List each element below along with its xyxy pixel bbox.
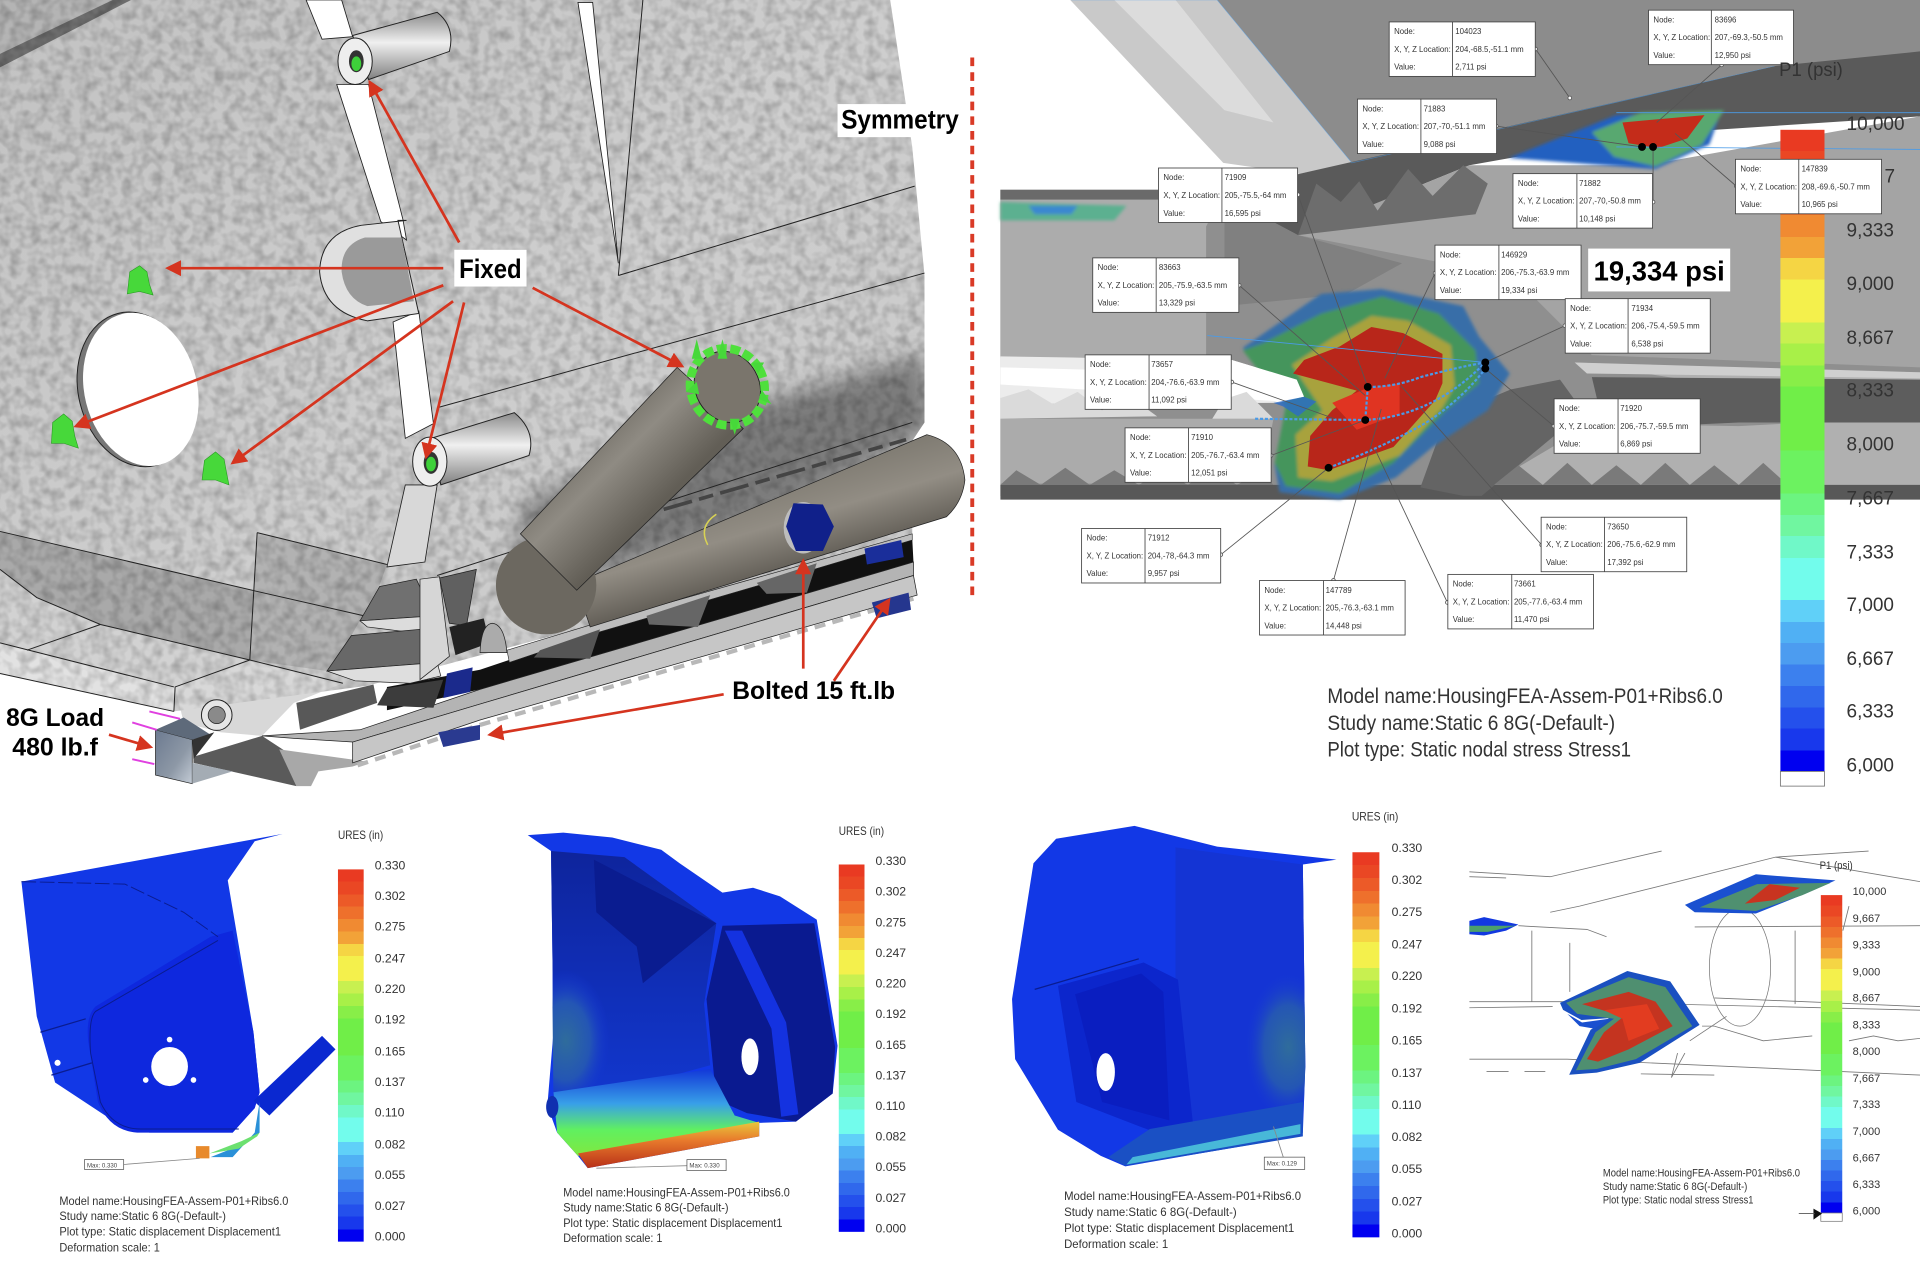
callout: node 71910: [1125, 428, 1271, 482]
callout: node 147839: [1735, 159, 1882, 214]
callout: node 71910: Value:: [1130, 469, 1152, 478]
callout: node 71920: Value:: [1559, 440, 1581, 449]
model info B: Model name:HousingFEA-Assem-P01+Ribs6.0: [563, 1185, 790, 1199]
model info A: Model name:HousingFEA-Assem-P01+Ribs6.0: [59, 1194, 289, 1208]
legend labels B: [839, 824, 906, 1235]
callout: node 73650: Value:: [1546, 558, 1568, 567]
callout: node 147789: Value:: [1264, 621, 1286, 630]
callout: node 146929: Node:: [1440, 250, 1461, 259]
peak stress label: 19,334 psi: [1594, 255, 1725, 286]
mesh zigzag facets: [1000, 165, 1788, 485]
callout: node 71883: Node:: [1362, 104, 1383, 113]
legend labels B: 0.247: [876, 946, 906, 960]
fixed ring on tube end: [676, 335, 779, 439]
heat map: left strip: [1000, 202, 1127, 220]
legend labels A: 0.000: [375, 1229, 406, 1243]
callout: node 73661: [1448, 574, 1593, 629]
callout: node 71909: 16,595 psi: [1225, 209, 1261, 218]
callout: node 71909: Value:: [1163, 209, 1185, 218]
legend labels B: 0.275: [876, 915, 906, 929]
callout: node 147839: Value:: [1740, 200, 1762, 209]
callout: node 147839: Node:: [1740, 165, 1761, 174]
legend labels B: 0.220: [876, 977, 906, 991]
callout: node 71912: 9,957 psi: [1148, 569, 1180, 578]
callout: node 71883: 9,088 psi: [1424, 140, 1456, 149]
legend labels B: 0.137: [876, 1068, 906, 1082]
model info: Plot type: Static nodal stress Stress1: [1327, 739, 1631, 762]
legend bar C: [1352, 852, 1379, 1237]
label: 8G Load: [6, 704, 104, 762]
callout: node 73661: Node:: [1453, 580, 1474, 589]
legend labels C: 0.137: [1392, 1066, 1422, 1080]
callout: node 71882: Value:: [1518, 214, 1540, 223]
load arrows: [132, 711, 180, 764]
callout: node 147789: [1260, 581, 1405, 635]
leader lines: [1219, 47, 1738, 604]
callout: node 71912: 204,-78,-64.3 mm: [1148, 551, 1210, 560]
legend labels C: 0.055: [1392, 1162, 1422, 1176]
max marker A: [84, 1158, 200, 1169]
model info A: [59, 1194, 289, 1254]
lower rail: [262, 534, 917, 765]
callout: node 146929: 19,334 psi: [1501, 286, 1537, 295]
callout: node 71883: 207,-70,-51.1 mm: [1424, 122, 1485, 131]
callout: node 104023: 104023: [1455, 27, 1482, 36]
stress legend labels: 6,333: [1847, 702, 1894, 723]
model info A: Plot type: Static displacement Displacement1: [59, 1225, 281, 1239]
callout: node 83696: [1649, 10, 1794, 65]
housing model C: [1012, 826, 1337, 1166]
legend labels B: 0.055: [876, 1160, 906, 1174]
callout: node 147839: 208,-69.6,-50.7 mm: [1802, 182, 1870, 191]
stress legend labels: 10,000: [1847, 114, 1905, 135]
callout: node 83696: 12,950 psi: [1715, 51, 1751, 60]
callout: node 83663: X, Y, Z Location:: [1098, 281, 1154, 290]
legend labels B: 0.000: [876, 1221, 906, 1235]
legend labels B: 0.330: [876, 854, 906, 868]
legend bar D: [1799, 895, 1842, 1221]
model info C: Study name:Static 6 8G(-Default-): [1064, 1205, 1237, 1219]
legend labels D: 9,000: [1853, 966, 1880, 978]
model info C: Model name:HousingFEA-Assem-P01+Ribs6.0: [1064, 1189, 1301, 1203]
legend labels B: URES (in): [839, 824, 884, 838]
callout: node 73650: 206,-75.6,-62.9 mm: [1607, 540, 1676, 549]
panel: displacement view C: [1012, 809, 1422, 1251]
heat map D: upper: [1685, 874, 1836, 913]
stress legend labels: 6,667: [1847, 649, 1894, 670]
arrows from Bolted: [490, 561, 889, 735]
model info C: Plot type: Static displacement Displacement1: [1064, 1221, 1294, 1235]
end boss: [201, 700, 232, 730]
legend labels A: 0.027: [375, 1199, 406, 1213]
callout: node 71920: 206,-75.7,-59.5 mm: [1620, 422, 1689, 431]
model info A: Study name:Static 6 8G(-Default-): [59, 1209, 226, 1223]
callout: node 147789: 205,-76.3,-63.1 mm: [1326, 604, 1394, 613]
legend labels C: 0.082: [1392, 1130, 1422, 1144]
callout: node 73657: 204,-76.6,-63.9 mm: [1151, 378, 1220, 387]
legend labels B: 0.082: [876, 1130, 906, 1144]
legend labels D: P1 (psi): [1820, 860, 1853, 872]
callout: node 71909: 205,-75.5,-64 mm: [1225, 191, 1286, 200]
callout: node 83696: 83696: [1715, 15, 1737, 24]
callout: node 147789: 147789: [1326, 586, 1352, 595]
callout: node 71934: Value:: [1570, 339, 1592, 348]
legend labels A: [338, 828, 406, 1243]
callout: node 71882: 71882: [1579, 179, 1601, 188]
callout: node 73661: X, Y, Z Location:: [1453, 597, 1509, 606]
legend labels C: 0.110: [1392, 1098, 1422, 1112]
stress legend labels: 7,667: [1847, 488, 1894, 509]
stress legend labels: [1779, 60, 1905, 776]
blue study outlines: [1071, 0, 1920, 468]
callout: node 71882: 207,-70,-50.8 mm: [1579, 197, 1641, 206]
legend labels A: 0.082: [375, 1138, 406, 1152]
callout: node 71934: 206,-75.4,-59.5 mm: [1631, 322, 1700, 331]
shading on housing: [0, 0, 931, 736]
callout: node 73650: Node:: [1546, 522, 1567, 531]
callout: node 147789: 14,448 psi: [1326, 621, 1362, 630]
label: Fixed: Fixed: [459, 254, 522, 284]
label: Symmetry: Symmetry: [841, 105, 959, 135]
bolts: [438, 502, 911, 747]
callout: node 71920: X, Y, Z Location:: [1559, 422, 1616, 431]
legend labels A: 0.302: [375, 889, 406, 903]
model info B: Plot type: Static displacement Displacement1: [563, 1216, 783, 1230]
stress legend labels: 7,333: [1847, 542, 1894, 563]
arrows from Fixed: [76, 82, 682, 463]
panel: displacement view B: [522, 824, 906, 1245]
stress legend labels: 8,000: [1847, 435, 1894, 456]
legend labels A: 0.137: [375, 1075, 406, 1089]
callout: node 71909: Node:: [1163, 173, 1184, 182]
callout: node 146929: 206,-75.3,-63.9 mm: [1501, 268, 1569, 277]
heat map D: left: [1469, 917, 1518, 936]
probe points: [1325, 143, 1657, 472]
legend bar A: [338, 869, 364, 1242]
model info: [1327, 685, 1723, 762]
panel: stress probe plot: [1000, 0, 1920, 786]
callout: node 71910: X, Y, Z Location:: [1130, 451, 1187, 460]
callout: node 104023: Value:: [1394, 63, 1416, 72]
model info C: Deformation scale: 1: [1064, 1237, 1168, 1251]
legend labels D: [1820, 860, 1886, 1218]
legend labels D: 6,333: [1853, 1179, 1880, 1191]
callout: node 104023: Node:: [1394, 27, 1415, 36]
peak stress label: [1588, 249, 1730, 291]
callout: node 83663: Node:: [1098, 263, 1119, 272]
model info D: Plot type: Static nodal stress Stress1: [1603, 1195, 1753, 1207]
callout: node 104023: 204,-68.5,-51.1 mm: [1455, 45, 1524, 54]
label: 8G Load: 480 lb.f: [12, 734, 99, 762]
legend bar B: [839, 864, 864, 1232]
model info D: Study name:Static 6 8G(-Default-): [1603, 1181, 1747, 1193]
legend labels A: 0.275: [375, 920, 406, 934]
max marker B: [596, 1160, 726, 1171]
callout: node 71910: 205,-76.7,-63.4 mm: [1191, 451, 1260, 460]
max marker C: Max: 0.129: [1267, 1161, 1298, 1168]
callout: node 71882: Node:: [1518, 179, 1539, 188]
panel: stress iso-plot view D: [1469, 851, 1920, 1221]
exhaust tube lower: [496, 435, 965, 634]
callout: node 71909: [1158, 168, 1298, 222]
label: 8G Load: 8G Load: [6, 704, 104, 732]
end rib and dark load arm: [193, 736, 367, 786]
legend labels A: URES (in): [338, 828, 383, 842]
callout: node 71910: 71910: [1191, 433, 1214, 442]
legend labels C: 0.027: [1392, 1195, 1422, 1209]
callout: node 83663: 205,-75.9,-63.5 mm: [1159, 281, 1227, 290]
callout: node 71912: X, Y, Z Location:: [1086, 551, 1143, 560]
legend labels A: 0.247: [375, 951, 406, 965]
legend labels C: 0.220: [1392, 969, 1422, 983]
callout: node 71912: Node:: [1086, 534, 1107, 543]
legend labels B: 0.302: [876, 885, 906, 899]
max marker B: Max: 0.330: [689, 1163, 720, 1170]
callout: node 83663: [1093, 258, 1239, 312]
callout: node 73657: [1085, 355, 1231, 409]
legend labels B: 0.027: [876, 1191, 906, 1205]
housing ribs: [327, 569, 507, 683]
housing model A: [21, 834, 336, 1158]
callout: node 73661: 11,470 psi: [1514, 615, 1550, 624]
legend labels B: 0.165: [876, 1038, 906, 1052]
callout: node 83663: Value:: [1098, 299, 1119, 308]
exhaust tube upper: [520, 339, 773, 590]
callout: node 71883: X, Y, Z Location:: [1362, 122, 1419, 131]
legend labels D: 10,000: [1853, 886, 1886, 898]
callout: node 73657: Value:: [1090, 396, 1112, 405]
callout: node 71920: 71920: [1620, 404, 1643, 413]
callout: node 146929: [1435, 245, 1581, 300]
legend labels D: 7,667: [1853, 1073, 1880, 1085]
callout: node 147839: X, Y, Z Location:: [1740, 182, 1797, 191]
legend labels D: 8,333: [1853, 1020, 1880, 1032]
callout: node 71920: [1554, 399, 1700, 453]
stress legend labels: 8,333: [1847, 381, 1894, 402]
callout: node 73661: 73661: [1514, 580, 1536, 589]
mesh background: [1000, 0, 1920, 500]
label: Bolted 15 ft.lb: Bolted 15 ft.lb: [732, 677, 895, 705]
model info A: Deformation scale: 1: [59, 1240, 160, 1254]
callout: node 71920: Node:: [1559, 404, 1580, 413]
callout: node 71934: [1565, 299, 1710, 353]
upper mounting boss: [338, 12, 451, 84]
callout: node 73657: X, Y, Z Location:: [1090, 378, 1147, 387]
model info C: [1064, 1189, 1301, 1251]
housing model B: [522, 833, 838, 1168]
legend labels C: 0.165: [1392, 1033, 1422, 1047]
callout: node 83696: Node:: [1653, 15, 1674, 24]
panel: displacement view A: [21, 828, 406, 1254]
callout: node 71883: [1357, 99, 1497, 154]
legend labels A: 0.220: [375, 982, 406, 996]
callout: node 71909: X, Y, Z Location:: [1163, 191, 1220, 200]
legend labels C: [1352, 809, 1422, 1240]
callout: node 71882: 10,148 psi: [1579, 214, 1615, 223]
model info B: Study name:Static 6 8G(-Default-): [563, 1201, 729, 1215]
white slits: [306, 0, 618, 567]
callout: node 71882: X, Y, Z Location:: [1518, 197, 1575, 206]
callout: node 73661: Value:: [1453, 615, 1474, 624]
symmetry line: [971, 58, 974, 596]
callout: node 83663: 83663: [1159, 263, 1181, 272]
max marker A: Max: 0.330: [87, 1162, 118, 1169]
legend labels C: URES (in): [1352, 809, 1398, 823]
legend labels D: 8,667: [1853, 993, 1880, 1005]
callout: node 73650: 17,392 psi: [1607, 558, 1644, 567]
callout: node 71912: 71912: [1148, 534, 1169, 543]
max marker C: [1264, 1127, 1305, 1169]
stress legend labels: 8,667: [1847, 328, 1894, 349]
callout: node 71934: 71934: [1631, 304, 1654, 313]
legend labels A: 0.110: [375, 1106, 405, 1120]
legend labels A: 0.165: [375, 1045, 406, 1059]
callout: node 73657: 11,092 psi: [1151, 396, 1187, 405]
callout: node 71912: Value:: [1086, 569, 1108, 578]
callout: node 71934: X, Y, Z Location:: [1570, 322, 1627, 331]
callout: node 71883: Value:: [1362, 140, 1384, 149]
model info D: [1603, 1168, 1800, 1207]
legend labels A: 0.192: [375, 1013, 406, 1027]
callout: node 71912: [1082, 528, 1221, 583]
heat map: upper hot spot: [1509, 110, 1724, 169]
legend labels C: 0.330: [1392, 841, 1422, 855]
load block: [156, 718, 233, 784]
callout: node 71920: 6,869 psi: [1620, 440, 1652, 449]
heat map: main hot spot: [1232, 289, 1510, 500]
stress legend labels: 7,000: [1847, 595, 1894, 616]
callout: node 104023: 2,711 psi: [1455, 63, 1487, 72]
callout: node 73657: Node:: [1090, 360, 1111, 369]
callout: node 71934: 6,538 psi: [1631, 339, 1663, 348]
legend labels A: 0.330: [375, 858, 406, 872]
model info: Study name:Static 6 8G(-Default-): [1327, 712, 1615, 735]
callout: node 73650: 73650: [1607, 522, 1630, 531]
legend labels D: 8,000: [1853, 1046, 1880, 1058]
callout: node 147789: Node:: [1264, 586, 1285, 595]
panel: boundary conditions model: [0, 0, 972, 786]
legend labels C: 0.275: [1392, 905, 1422, 919]
legend labels A: 0.055: [375, 1168, 406, 1182]
stress legend labels: 6,000: [1847, 755, 1894, 776]
legend labels D: 6,000: [1853, 1206, 1880, 1218]
legend labels D: 6,667: [1853, 1152, 1880, 1164]
callout: node 104023: X, Y, Z Location:: [1394, 45, 1451, 54]
callout: node 73650: [1541, 517, 1687, 572]
legend labels C: 0.000: [1392, 1226, 1422, 1240]
wireframe lines: [1469, 851, 1920, 1078]
stress legend labels: 9,333: [1847, 220, 1894, 241]
callout: node 73661: 205,-77.6,-63.4 mm: [1514, 597, 1582, 606]
stress legend bar: [1780, 130, 1824, 786]
callout: node 71910: 12,051 psi: [1191, 469, 1228, 478]
model info B: Deformation scale: 1: [563, 1231, 663, 1245]
legend labels D: 9,667: [1853, 913, 1880, 925]
model info D: Model name:HousingFEA-Assem-P01+Ribs6.0: [1603, 1168, 1800, 1180]
callout: node 104023: [1389, 22, 1535, 76]
callout: node 83696: Value:: [1653, 51, 1675, 60]
callout: node 146929: Value:: [1440, 286, 1462, 295]
housing body: [0, 0, 924, 711]
heat map D: lower: [1560, 971, 1700, 1075]
callout: node 73650: X, Y, Z Location:: [1546, 540, 1603, 549]
legend labels C: 0.192: [1392, 1002, 1422, 1016]
legend labels D: 9,333: [1853, 939, 1880, 951]
callout: node 147839: 10,965 psi: [1802, 200, 1838, 209]
access hole: [61, 299, 214, 480]
legend labels C: 0.247: [1392, 937, 1422, 951]
callout: node 146929: X, Y, Z Location:: [1440, 268, 1497, 277]
callout: node 146929: 146929: [1501, 250, 1527, 259]
fixed constraint markers: [51, 266, 229, 485]
stress legend labels: 7: [1884, 166, 1895, 187]
callout: node 71934: Node:: [1570, 304, 1591, 313]
callout: node 83696: 207,-69.3,-50.5 mm: [1715, 33, 1783, 42]
stress legend labels: 9,000: [1847, 274, 1894, 295]
legend labels B: 0.192: [876, 1007, 906, 1021]
callout: node 83663: 13,329 psi: [1159, 299, 1195, 308]
callout: node 147789: X, Y, Z Location:: [1264, 604, 1321, 613]
slot recess: [342, 238, 414, 306]
callout: node 83696: X, Y, Z Location:: [1653, 33, 1710, 42]
callout: node 71882: [1513, 174, 1653, 228]
arrow: load: [109, 735, 151, 747]
legend labels D: 7,000: [1853, 1126, 1880, 1138]
model info: Model name:HousingFEA-Assem-P01+Ribs6.0: [1327, 685, 1723, 708]
callout: node 71883: 71883: [1424, 104, 1446, 113]
lower mounting boss: [413, 413, 531, 486]
stress legend labels: P1 (psi): [1779, 60, 1843, 81]
callout: node 73657: 73657: [1151, 360, 1173, 369]
cutout slot: [320, 220, 419, 321]
model info B: [563, 1185, 790, 1245]
legend labels C: 0.302: [1392, 873, 1422, 887]
callout: node 71909: 71909: [1225, 173, 1246, 182]
callout: node 71910: Node:: [1130, 433, 1151, 442]
callout: node 147839: 147839: [1802, 165, 1828, 174]
legend labels D: 7,333: [1853, 1099, 1880, 1111]
legend labels B: 0.110: [876, 1099, 905, 1113]
